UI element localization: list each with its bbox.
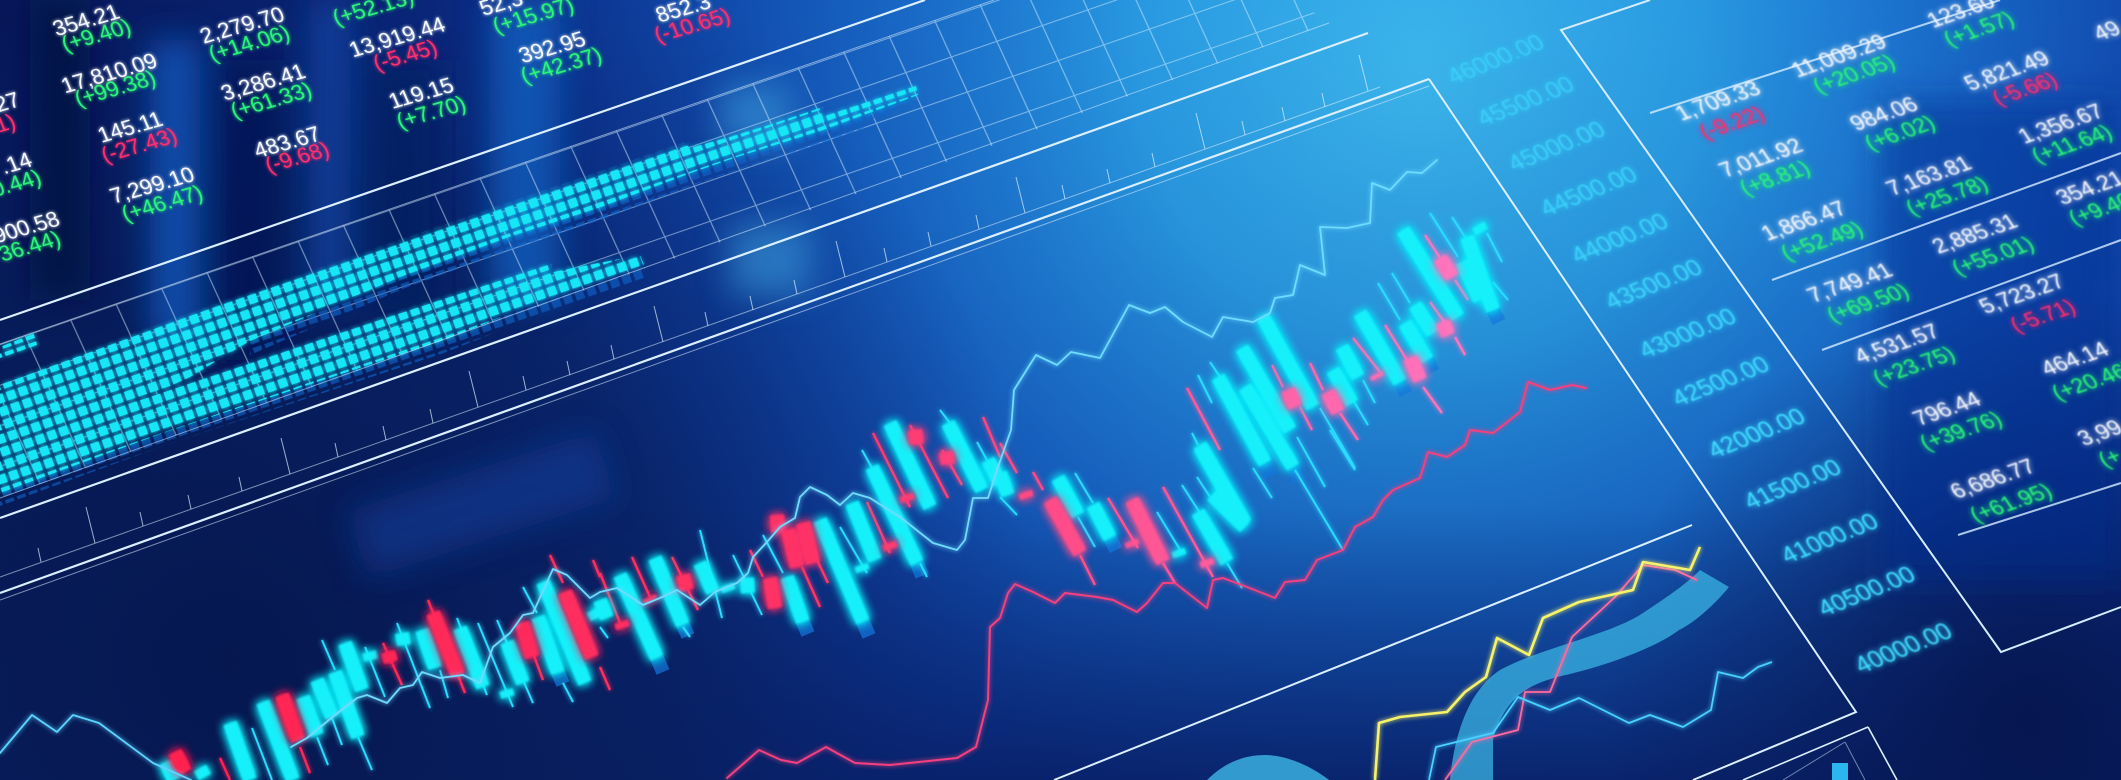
right data table: 464.14: [2036, 337, 2114, 380]
translucent blob: [1207, 755, 1329, 780]
price axis labels: 42000.00: [1703, 404, 1811, 464]
price axis labels: [1442, 30, 1958, 679]
right data table: (+23.75): [1868, 342, 1960, 390]
price axis labels: 43500.00: [1600, 255, 1708, 315]
right data table: (-5.71): [2005, 295, 2080, 337]
mini bar: [1832, 763, 1848, 780]
right data table: 1,866.47: [1756, 196, 1851, 245]
left data table: 354.21: [49, 0, 123, 41]
price axis labels: 46000.00: [1442, 30, 1550, 90]
left data table: (-10.65): [650, 3, 734, 47]
candle wicks red: [220, 235, 1468, 780]
candle bodies red: [175, 258, 1452, 772]
left data table: (+99.38): [70, 65, 160, 111]
right data table: (+25.78): [1901, 172, 1993, 220]
led bars reflection: [0, 95, 918, 506]
left data table: 119.15: [385, 72, 458, 114]
top band grid with LED bars: [0, 0, 1329, 506]
price axis labels: 44500.00: [1535, 162, 1643, 222]
left data table: (-9.68): [261, 137, 333, 178]
right data table: 2,885.31: [1927, 209, 2022, 258]
left data table: 145.11: [94, 106, 167, 148]
red trend line: [727, 382, 1586, 778]
candle reflections: [558, 310, 1499, 684]
band lines and ticks: [0, 0, 1429, 600]
right data table: (+61.95): [1965, 479, 2057, 527]
right data table: (+11.64): [2026, 120, 2117, 167]
right data table: 11,009.29: [1786, 29, 1891, 82]
candlestick chart: [166, 213, 1508, 780]
right data table: 1,356.67: [2013, 99, 2108, 148]
price axis labels: 41500.00: [1739, 455, 1847, 515]
price axis labels: 42500.00: [1667, 352, 1775, 412]
left data table: (+61.33): [226, 77, 316, 123]
right data table: (+20.05): [1808, 50, 1900, 98]
right data table: (+55.01): [1947, 232, 2039, 280]
light cyan line: [1429, 662, 1772, 780]
main chart panel frame: [1054, 79, 1897, 780]
right data table: (+69.50): [1822, 279, 1914, 327]
left data table: [0, 0, 734, 268]
left data table: 7,299.10: [106, 162, 198, 208]
right data table: 7,749.41: [1802, 258, 1897, 307]
right data table: 6,686.77: [1945, 454, 2040, 503]
translucent band: [1450, 570, 1729, 780]
candle bodies cyan: [166, 225, 1493, 780]
left data table: 483.67: [250, 121, 324, 163]
price axis labels: 45500.00: [1472, 72, 1580, 132]
left data table: (+46.47): [117, 180, 207, 226]
right data table: (+8.81): [1734, 156, 1815, 200]
right data table: 1,709.33: [1670, 76, 1765, 125]
left data table: (-5.45): [369, 35, 441, 76]
right data table: 5,821.49: [1959, 46, 2054, 95]
right data table: [1670, 0, 2121, 527]
price axis labels: 40000.00: [1850, 619, 1958, 679]
left data table: 3,286.41: [217, 59, 309, 105]
left data table: 13,919.44: [345, 12, 449, 62]
left data table: 17,810.09: [57, 48, 161, 98]
right data table: 984.06: [1845, 92, 1923, 135]
price axis labels: 44000.00: [1566, 209, 1674, 269]
candle wicks: [252, 213, 1508, 780]
price axis labels: 40500.00: [1813, 562, 1921, 622]
price axis labels: 45000.00: [1503, 117, 1611, 177]
right data table: (-5.66): [1987, 68, 2062, 110]
yellow line: [1375, 547, 1700, 780]
left data table: (+42.37): [516, 42, 606, 88]
right table frame: [1561, 0, 2121, 652]
pink line: [1445, 565, 1697, 780]
right data table: 796.44: [1908, 387, 1986, 430]
price axis labels: 43000.00: [1634, 304, 1742, 364]
right data table: (+6.02): [1859, 111, 1940, 155]
cyan moving average line: [0, 160, 1437, 780]
left data table: (+7.70): [392, 91, 470, 133]
right data table: (+1.57): [1938, 7, 2019, 51]
right data table: (+39.76): [1915, 407, 2007, 455]
left data table: 392.95: [515, 26, 589, 68]
left data table: (-27.43): [97, 123, 181, 167]
price axis labels: 41000.00: [1776, 509, 1884, 569]
right data table: (+52.49): [1776, 217, 1868, 265]
right data table: 4,531.57: [1849, 319, 1944, 368]
left data table: (+14.06): [204, 20, 294, 66]
left data table: 2,279.70: [196, 2, 288, 48]
right data table: (-9.22): [1694, 102, 1769, 144]
sub chart: [1207, 547, 1772, 780]
right data table: 7,163.81: [1881, 151, 1976, 200]
right data table: 5,723.27: [1974, 269, 2069, 318]
right data table: 7,011.92: [1714, 133, 1808, 182]
left data table: (+9.40): [57, 14, 135, 56]
led bars: [0, 86, 918, 493]
